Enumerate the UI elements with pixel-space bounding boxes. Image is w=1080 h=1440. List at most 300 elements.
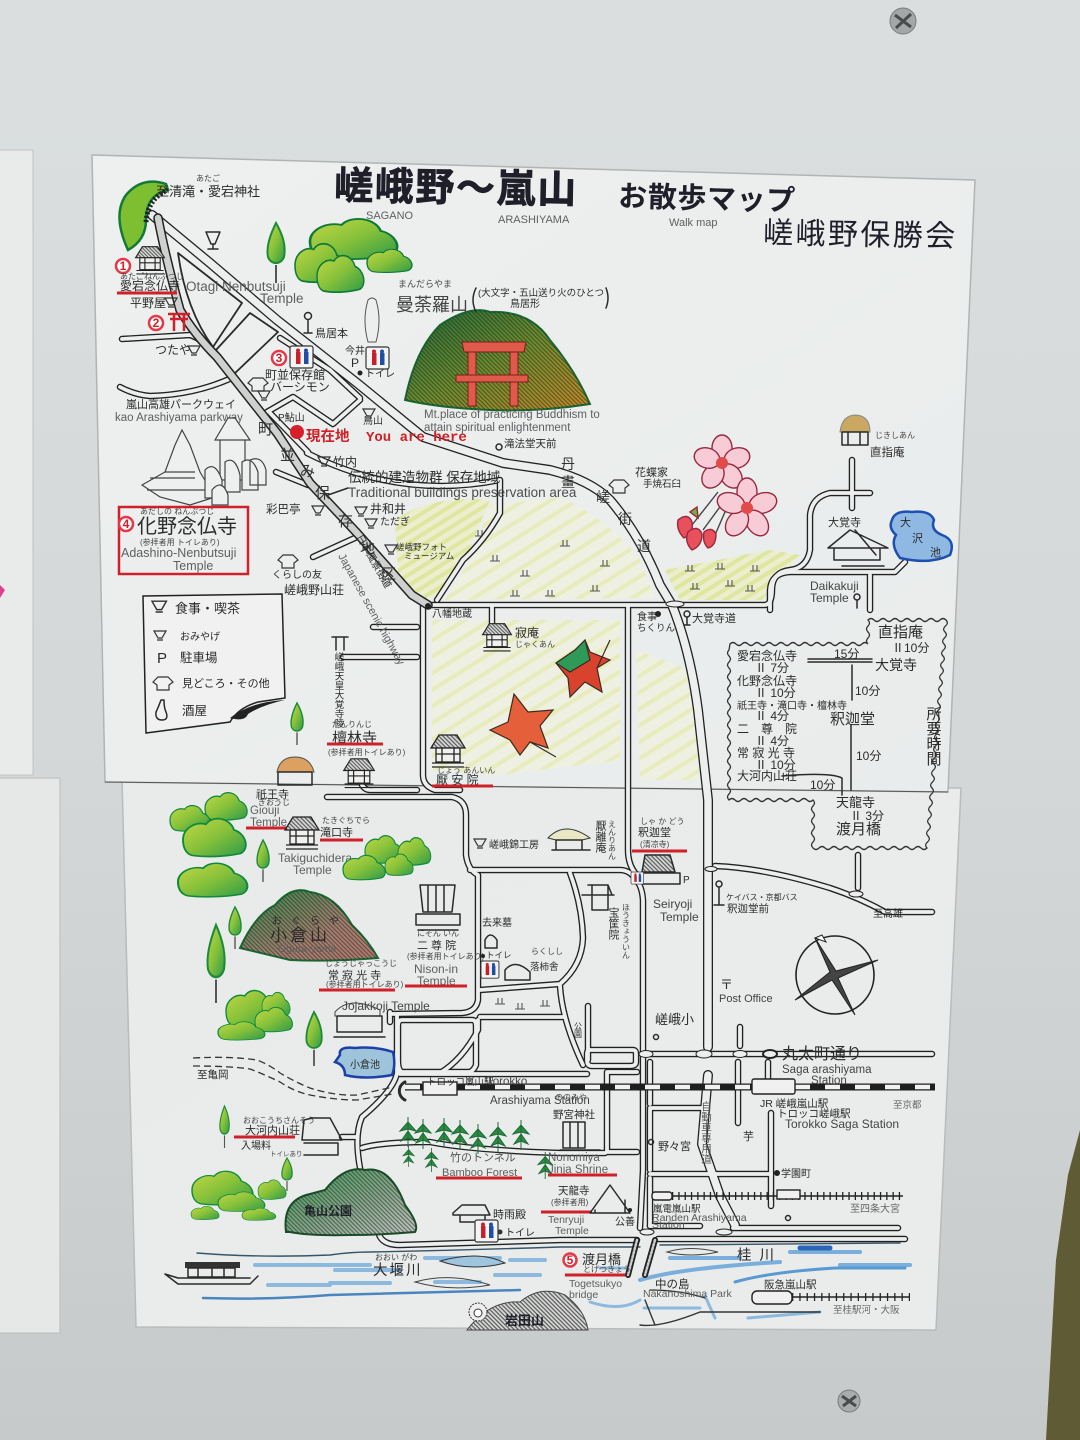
screw top right <box>890 8 916 34</box>
legend panel <box>143 594 285 733</box>
temple: Daikakuji: 大覚寺 <box>828 515 861 529</box>
neighbouring white panels at left edge <box>0 150 60 1333</box>
shops along street: 井和井 <box>370 502 406 516</box>
temple: Jakuan: 寂庵 <box>515 626 539 640</box>
pond: Osawa: 池 <box>930 546 941 559</box>
vertical street label <box>258 421 396 583</box>
temple: Gioji with orange hut: Temple <box>250 817 287 829</box>
hut: Enriin: 厭離庵 <box>594 820 606 854</box>
time guide box: 10分 <box>810 778 835 792</box>
temple: Seiryoji / Shakado: Temple <box>660 910 699 924</box>
private road vertical label: 自動車専用道 <box>700 1100 712 1164</box>
Kyorai grave and Rakushisha <box>481 916 563 980</box>
time guide box: 所要時間 <box>924 706 942 767</box>
temple: Okochi Sanso: 入場料 <box>241 1139 271 1152</box>
temple: Okochi Sanso: 大河内山荘 <box>245 1123 300 1137</box>
label: Mandarayama: まんだらやま <box>398 279 452 289</box>
Saga elementary label: 嵯峨小 <box>655 1012 694 1027</box>
label: Nakanoshima <box>643 1277 732 1300</box>
scenic highway label: 日本風景街道 <box>353 532 395 590</box>
vertical street label: 区 <box>381 566 396 583</box>
time guide box: Ⅱ 4分 <box>755 709 789 723</box>
Marutamachi street labels: 丸太町通り <box>782 1045 862 1063</box>
Marutamachi street labels: Saga arashiyama <box>782 1064 872 1076</box>
temple: Gioji with orange hut <box>246 757 374 829</box>
road name characters: 嵯 <box>596 489 610 505</box>
temple: Jojakkoji: Jojakkoji Temple <box>342 999 430 1013</box>
temple: Gioji with orange hut: ぎおうじ <box>258 797 290 807</box>
temple: Nison-in <box>405 885 485 988</box>
caption: place of practicing Buddhism <box>424 409 600 450</box>
temple: Gioji with orange hut: 祇王寺 <box>256 788 289 801</box>
time guide box: 大覚寺 <box>875 657 917 673</box>
temple: Tenryuji <box>541 1184 635 1237</box>
temple: Okochi Sanso: おおこうちさんそう <box>243 1116 315 1125</box>
time guide box: Ⅱ 3分 <box>850 809 884 823</box>
you are here marker: You are here <box>366 430 467 446</box>
label: Atago shrine <box>156 173 260 199</box>
label: Otagi Nenbutsuji Temple: Otagi Nenbutsuji <box>186 279 286 294</box>
labels: Nonomiya and Gakuen: 芋 <box>743 1130 754 1143</box>
screw bottom right <box>838 1390 860 1412</box>
bushes near Kameyama <box>191 1171 286 1220</box>
caption: place of practicing Buddhism: attain spiritual enlightenment <box>424 422 571 434</box>
vertical street label: 地 <box>360 540 375 557</box>
labels: Nonomiya and Gakuen: 至四条大宮 <box>850 1202 900 1215</box>
label: Hankyu Arashiyama: 至桂駅河・大阪 <box>833 1304 900 1316</box>
time guide box: 釈迦堂 <box>830 711 875 728</box>
temple: Seiryoji / Shakado: (清凉寺) <box>640 839 670 849</box>
temple: Tenryuji: Tenryuji <box>548 1214 584 1226</box>
toilet 3: 町並保存館 <box>265 368 325 382</box>
road roundabouts <box>639 601 863 1235</box>
temple: Daikakuji: Temple <box>810 591 849 605</box>
vertical street label: み <box>300 463 315 480</box>
temple: Seiryoji / Shakado: Seiryoji <box>653 897 692 911</box>
shop: Chikurin: ちくりん <box>637 623 675 634</box>
Hachiman Jizo label <box>425 603 472 620</box>
vertical street label: 町 <box>258 421 273 438</box>
hut: Enriin <box>548 820 616 860</box>
bridge callout: Togetsukyo: とげつきょう <box>583 1265 631 1274</box>
labels: parking shops: 鳥山 <box>363 414 383 427</box>
shrine: Nonomiya: Jinja Shrine <box>548 1164 608 1176</box>
time guide box: 祇王寺・滝口寺・檀林寺 <box>737 699 847 712</box>
label: Atago shrine: 至清滝・愛宕神社 <box>156 184 260 199</box>
time guide box: Ⅱ10分 <box>892 641 929 655</box>
bus stop: Shakado-mae <box>714 881 798 915</box>
temple: Tenryuji: (参拝者用) <box>551 1197 589 1207</box>
dashed trail to Kameoka <box>193 1057 393 1100</box>
pond: Osawa <box>891 512 952 561</box>
time guide box: 大河内山荘 <box>737 769 797 783</box>
callout: Adashino Nenbutsuji: 4 <box>123 517 130 531</box>
river labels: 桂川 <box>737 1247 782 1264</box>
label: Hanachoka shop: 手焼石臼 <box>643 478 681 490</box>
tree <box>267 223 285 283</box>
title: SAGANO <box>366 210 414 222</box>
Kyorai grave and Rakushisha: 落柿舎 <box>530 961 559 973</box>
temple: Nison-in: (参拝者用トイレあり) <box>407 951 485 961</box>
road name characters: 道 <box>637 538 651 554</box>
caption: place of practicing Buddhism: 滝法堂天前 <box>504 437 556 450</box>
bushes centre <box>343 836 431 880</box>
mountain: Kameyama park: 亀山公園 <box>304 1203 352 1218</box>
legend panel: P <box>157 650 167 667</box>
temple: Okochi Sanso <box>234 1116 342 1158</box>
torii gate <box>456 342 528 406</box>
temple: Jikishian <box>840 415 915 459</box>
callout: Adashino Nenbutsuji <box>119 507 248 574</box>
bridge callout: Togetsukyo: 5 <box>567 1253 574 1267</box>
post office: 〒 <box>720 977 733 992</box>
label: Mandarayama: (大文字・五山送り火のひとつ <box>478 287 604 299</box>
bushes left <box>170 793 247 897</box>
labels: Nonomiya and Gakuen: 学園町 <box>781 1167 811 1180</box>
time guide box: Ⅱ 4分 <box>755 734 789 748</box>
road name characters: 丹 <box>561 456 575 472</box>
labels: parking shops: P鮎山 <box>278 411 305 424</box>
temple: Takiguchidera: Temple <box>293 863 332 877</box>
shops along street: くらしの友 <box>272 568 322 581</box>
temple: Gioji with orange hut: Giouji <box>250 805 279 817</box>
temple: Jikishian: 直指庵 <box>870 445 905 459</box>
label: Atago shrine: あたご <box>196 173 220 183</box>
trees <box>207 840 322 1191</box>
label: Tsutaya: つたや <box>155 343 191 357</box>
Kyorai grave and Rakushisha: らくしし <box>531 947 563 956</box>
Marutamachi street labels: トロッコ嵯峨駅 <box>777 1107 851 1120</box>
legend panel: 駐車場 <box>180 650 218 665</box>
legend panel: 食事・喫茶 <box>175 601 240 616</box>
bus stop: Shakado-mae: 釈迦堂前 <box>727 902 769 915</box>
temple: Daikakuji: Daikakuji <box>810 579 859 593</box>
road network <box>120 215 932 1245</box>
shop: Chikurin <box>637 610 675 634</box>
title: 嵯峨野保勝会 <box>763 217 955 253</box>
time guide box: 15分 <box>834 647 859 661</box>
coloured fields <box>395 497 800 780</box>
time guide box: 常 寂 光 寺 <box>737 746 795 760</box>
temple: Danrinji <box>327 720 406 757</box>
temple 1: Atago Nenbutsuji: 1 <box>120 259 127 273</box>
temple: Seiryoji / Shakado: しゃ か どう <box>640 817 684 826</box>
label: Randen Arashiyama Station: Station <box>652 1219 685 1231</box>
labels: Nonomiya and Gakuen <box>648 1130 900 1220</box>
temple: Seian-in <box>431 735 495 787</box>
temple: Nison-in: にそん いん <box>417 929 459 938</box>
temple: Takiguchidera: Takiguchidera <box>278 851 352 865</box>
title: 嵯峨野～嵐山 <box>334 165 577 212</box>
temple: Jojakkoji <box>319 959 430 1037</box>
legend panel: 見どころ・その他 <box>182 677 270 690</box>
mountain: Iwatayama with monkey <box>467 1291 588 1330</box>
sake cup icon <box>206 232 220 249</box>
Marutamachi street labels: JR 嵯峨嵐山駅 <box>760 1097 829 1110</box>
mountain: Kameyama park <box>286 1169 416 1235</box>
labels: parkway <box>115 397 243 424</box>
label: Mandarayama <box>396 279 608 315</box>
label: traditional buildings: Traditional buildings preservation area <box>348 485 577 500</box>
vertical street label: 並 <box>280 447 295 464</box>
bamboo forest: 竹のトンネル <box>450 1150 516 1164</box>
bamboo forest <box>400 1117 552 1179</box>
time guide box: 直指庵 <box>878 624 923 641</box>
label: Randen Arashiyama Station: 嵐電嵐山駅 <box>653 1204 701 1215</box>
shrine: Nonomiya: ののみや <box>555 1093 587 1102</box>
river labels: おおい がわ <box>375 1252 417 1262</box>
temple 1: Atago Nenbutsuji: あたごねんぶつじ <box>120 271 184 281</box>
temple: Takiguchidera <box>278 816 370 877</box>
bus stop: Daikakuji-michi: 大覚寺道 <box>692 611 736 625</box>
toilet 3 <box>248 346 330 400</box>
temple: Jojakkoji: じょうじゃっこうじ <box>325 959 397 968</box>
Marutamachi street labels: Station <box>811 1075 847 1087</box>
shop: Chikurin: 食事 <box>637 610 657 623</box>
label: Toriimoto bus stop <box>304 312 348 340</box>
temple: Jakuan: じゃくあん <box>515 640 555 649</box>
pond: Ogura: 小倉池 <box>350 1058 380 1071</box>
road name characters: 街 <box>618 511 632 527</box>
Marutamachi street labels: Torokko Saga Station <box>785 1117 899 1131</box>
compass <box>795 935 878 1015</box>
time guide box: 二 尊 院 <box>737 721 797 736</box>
station: Torokko Arashiyama <box>399 1076 590 1107</box>
label: traditional buildings <box>328 470 577 500</box>
bamboo forest: Bamboo Forest <box>442 1167 517 1179</box>
label: Hiranoya: 平野屋 <box>130 296 166 310</box>
mountain: Ogura: 小倉山 <box>270 926 330 945</box>
time guide box: 化野念仏寺 <box>737 674 797 688</box>
mountain: Ogura: Ogura-yama <box>278 943 337 955</box>
post office: Post Office <box>719 993 773 1005</box>
mountain: Iwatayama with monkey: 岩田山 <box>505 1313 544 1328</box>
shops along street: 彩巴亭 <box>266 502 300 516</box>
shops along street <box>266 455 454 597</box>
label: Mandarayama: 曼荼羅山 <box>396 295 468 315</box>
Saga elementary label <box>654 1012 694 1040</box>
vertical park label: 公園 <box>574 1022 582 1039</box>
label: Otagi Nenbutsuji Temple <box>186 279 304 306</box>
grass patch <box>495 998 550 1009</box>
scenic highway label: Japanese scenic highway <box>335 552 407 668</box>
shops along street: 嵯峨野フォト <box>396 542 447 552</box>
time guide box: 天龍寺 <box>836 795 875 810</box>
torii icon and imperial tomb label <box>332 637 348 729</box>
hut: Enriin: えんりあん <box>608 820 616 860</box>
road label: Takao: 至高雄 <box>873 907 903 920</box>
callout: Adashino Nenbutsuji: (参拝者用 トイレあり) <box>140 537 220 547</box>
label: Toriimoto bus stop: 鳥居本 <box>315 326 348 340</box>
torii icon and imperial tomb label: 嵯峨天皇大覚寺陵 <box>332 651 344 729</box>
temple: Jakuan <box>483 624 555 651</box>
temple: Hokyoin <box>582 885 630 959</box>
cherry blossoms <box>678 435 779 550</box>
Marutamachi street labels <box>760 1045 922 1131</box>
shops along street: 竹内 <box>333 455 357 469</box>
temple: Takiguchidera: たきぐちでら <box>322 816 370 825</box>
callout: Adashino Nenbutsuji: Adashino-Nenbutsuji <box>121 546 236 560</box>
temple: Tenryuji: 天龍寺 <box>558 1184 590 1197</box>
label: Otagi Nenbutsuji Temple: Temple <box>260 291 304 306</box>
bus stop: Shakado-mae: ケイバス・京都バス <box>726 893 798 902</box>
shrine: Nonomiya: 野宮神社 <box>553 1108 595 1121</box>
time guide box: 10分 <box>856 749 881 763</box>
label: Mandarayama: 鳥居形 <box>510 297 540 310</box>
time guide box: 渡月橋 <box>836 821 881 838</box>
station: Torokko Arashiyama: トロッコ嵐山駅 <box>427 1077 494 1088</box>
rail lines <box>405 1087 935 1297</box>
station boxes <box>423 1079 800 1304</box>
temple 1: Atago Nenbutsuji <box>116 247 184 293</box>
title: お散歩マップ <box>618 180 796 218</box>
temple: Nison-in: Nison-in <box>414 962 458 976</box>
temple: Tenryuji: 公善 <box>615 1215 635 1228</box>
toilet Imai: 今井 <box>345 344 365 357</box>
stupa and stone buddhas <box>142 418 266 505</box>
post office <box>719 977 773 1005</box>
label: Hankyu Arashiyama <box>764 1278 900 1316</box>
bridge callout: Togetsukyo: bridge <box>569 1289 598 1301</box>
temple: Jojakkoji: (参拝者用トイレあり) <box>326 979 404 989</box>
shops along street: ミュージアム <box>404 551 454 561</box>
station: Torokko Arashiyama: Arashiyama Station <box>490 1095 590 1107</box>
labels: parkway: kao Arashiyama parkway <box>115 412 243 424</box>
temple: Seian-in: じょう あんいん <box>437 766 495 775</box>
time guide box: Ⅱ 10分 <box>755 686 796 700</box>
title <box>334 165 955 253</box>
label: Hanachoka shop: 花蝶家 <box>635 465 668 479</box>
pond: Ogura <box>335 1048 394 1078</box>
torii 2 <box>149 314 190 331</box>
temple: Danrinji: 檀林寺 <box>332 730 377 747</box>
Shigure-den rest stop <box>453 1205 535 1242</box>
temple: Takiguchidera: 滝口寺 <box>320 826 353 839</box>
callout: Adashino Nenbutsuji: 化野念仏寺 <box>137 515 237 538</box>
time guide box <box>728 618 947 850</box>
callout: Adashino Nenbutsuji: Temple <box>173 559 213 573</box>
temple: Okochi Sanso: トイレあり <box>270 1150 302 1158</box>
shrine: Nonomiya: Nonomiya <box>548 1152 600 1164</box>
time guide box: 10分 <box>855 684 880 698</box>
Kyorai grave and Rakushisha: 去来墓 <box>482 916 512 929</box>
toilet Imai: P <box>351 356 359 370</box>
shops along street: 嵯峨野山荘 <box>284 583 344 597</box>
river labels: 大堰川 <box>373 1262 422 1279</box>
road name characters: 畫 <box>561 474 575 490</box>
mountain: Atago crescent <box>119 182 168 250</box>
bridge callout: Togetsukyo: 渡月橋 <box>582 1252 621 1267</box>
Saga nishiki craft label: 嵯峨錦工房 <box>489 838 539 851</box>
title: Walk map <box>669 217 718 229</box>
labels: parkway: 嵐山高雄パークウェイ <box>126 397 236 411</box>
panel: upper map sheet <box>92 155 975 792</box>
temple: Nison-in: 二 尊 院 <box>417 938 456 952</box>
bushes lower <box>218 991 292 1040</box>
toilet 3: バーシモン <box>270 380 330 394</box>
temple: Seian-in: 厭 安 院 <box>436 773 479 787</box>
sightseeing boat <box>165 1262 258 1284</box>
temple: Nison-in: Temple <box>417 974 456 988</box>
temple: Danrinji: (参拝者用トイレあり) <box>328 747 406 757</box>
time guide box: Ⅱ 7分 <box>755 661 789 675</box>
temple: Seiryoji / Shakado: 釈迦堂 <box>638 826 671 839</box>
label: Randen Arashiyama Station: Randen Arashiyama <box>652 1212 747 1224</box>
you are here marker: 現在地 <box>306 428 350 445</box>
bridge callout: Togetsukyo: Togetsukyo <box>569 1278 622 1290</box>
river labels <box>373 1247 782 1279</box>
panel: lower map sheet <box>122 780 961 1330</box>
Shigure-den rest stop: 時雨殿 <box>493 1208 526 1221</box>
Shigure-den rest stop: トイレ <box>505 1228 535 1239</box>
label: Nakanoshima: Nakanoshima Park <box>643 1288 732 1300</box>
temple: Seiryoji / Shakado <box>631 817 699 924</box>
labels: parking shops <box>278 409 383 427</box>
bush cluster top <box>295 219 412 292</box>
small tree near legend <box>291 703 303 745</box>
toilet 3: 3 <box>276 351 283 365</box>
label: to Kameoka: 至亀岡 <box>197 1068 228 1081</box>
road name characters <box>561 456 651 554</box>
mountain with torii <box>405 310 590 410</box>
maple leaves <box>490 640 610 757</box>
river <box>197 1243 910 1325</box>
title: ARASHIYAMA <box>498 214 570 226</box>
pond: Osawa: 沢 <box>912 531 923 545</box>
block outlines near Otagi <box>178 253 278 375</box>
label: Randen Arashiyama Station <box>652 1204 747 1231</box>
toilet Imai: トイレ <box>365 369 395 380</box>
mountain: Ogura: おぐらや <box>272 915 348 927</box>
preserved street road with hatching <box>158 218 428 605</box>
Saga nishiki craft label <box>474 838 539 851</box>
time guide box: Ⅱ 10分 <box>755 758 796 772</box>
bridge callout: Togetsukyo <box>564 1252 631 1301</box>
pond: Osawa: 大 <box>900 515 911 529</box>
time guide box: 愛宕念仏寺 <box>737 649 797 663</box>
legend panel: おみやげ <box>180 631 220 643</box>
labels: Nonomiya and Gakuen: 野々宮 <box>658 1140 691 1153</box>
torii 2: 2 <box>153 316 160 330</box>
label: Nakanoshima: 中の島 <box>655 1277 690 1291</box>
caption: place of practicing Buddhism: Mt.place of practicing Buddhism to <box>424 409 600 421</box>
temple: Jikishian: じきしあん <box>875 431 915 440</box>
temple: Danrinji: だんりんじ <box>332 720 372 729</box>
temple: Tenryuji: Temple <box>555 1225 589 1237</box>
shops along street: ただぎ <box>380 515 410 528</box>
label: Hankyu Arashiyama: 阪急嵐山駅 <box>764 1278 817 1291</box>
callout: Adashino Nenbutsuji: あだしの ねんぶつじ <box>140 507 214 516</box>
shrine: Nonomiya <box>548 1093 617 1176</box>
toilet Imai <box>345 298 395 380</box>
Hachiman Jizo label: 八幡地蔵 <box>432 607 472 620</box>
legend panel: 酒屋 <box>182 704 207 718</box>
temple: Daikakuji <box>810 515 888 608</box>
Marutamachi street labels: 至京都 <box>893 1100 922 1111</box>
vertical street label: 保 <box>315 485 330 502</box>
temple: Hokyoin: 宝筐院 <box>607 907 620 940</box>
vertical street label: 存 <box>338 513 353 530</box>
mountain: Ogura <box>240 890 378 961</box>
label: Hanachoka shop <box>609 465 681 493</box>
temple: Seiryoji / Shakado: P <box>683 875 690 886</box>
label: traditional buildings: 伝統的建造物群 保存地域 <box>348 470 500 485</box>
you are here marker <box>290 425 467 446</box>
Togetsukyo bridge <box>628 1240 655 1275</box>
Kyorai grave and Rakushisha: トイレ <box>486 950 512 960</box>
temple: Jojakkoji: 常 寂 光 寺 <box>328 968 381 982</box>
temple 1: Atago Nenbutsuji: 愛宕念仏寺 <box>120 279 180 293</box>
